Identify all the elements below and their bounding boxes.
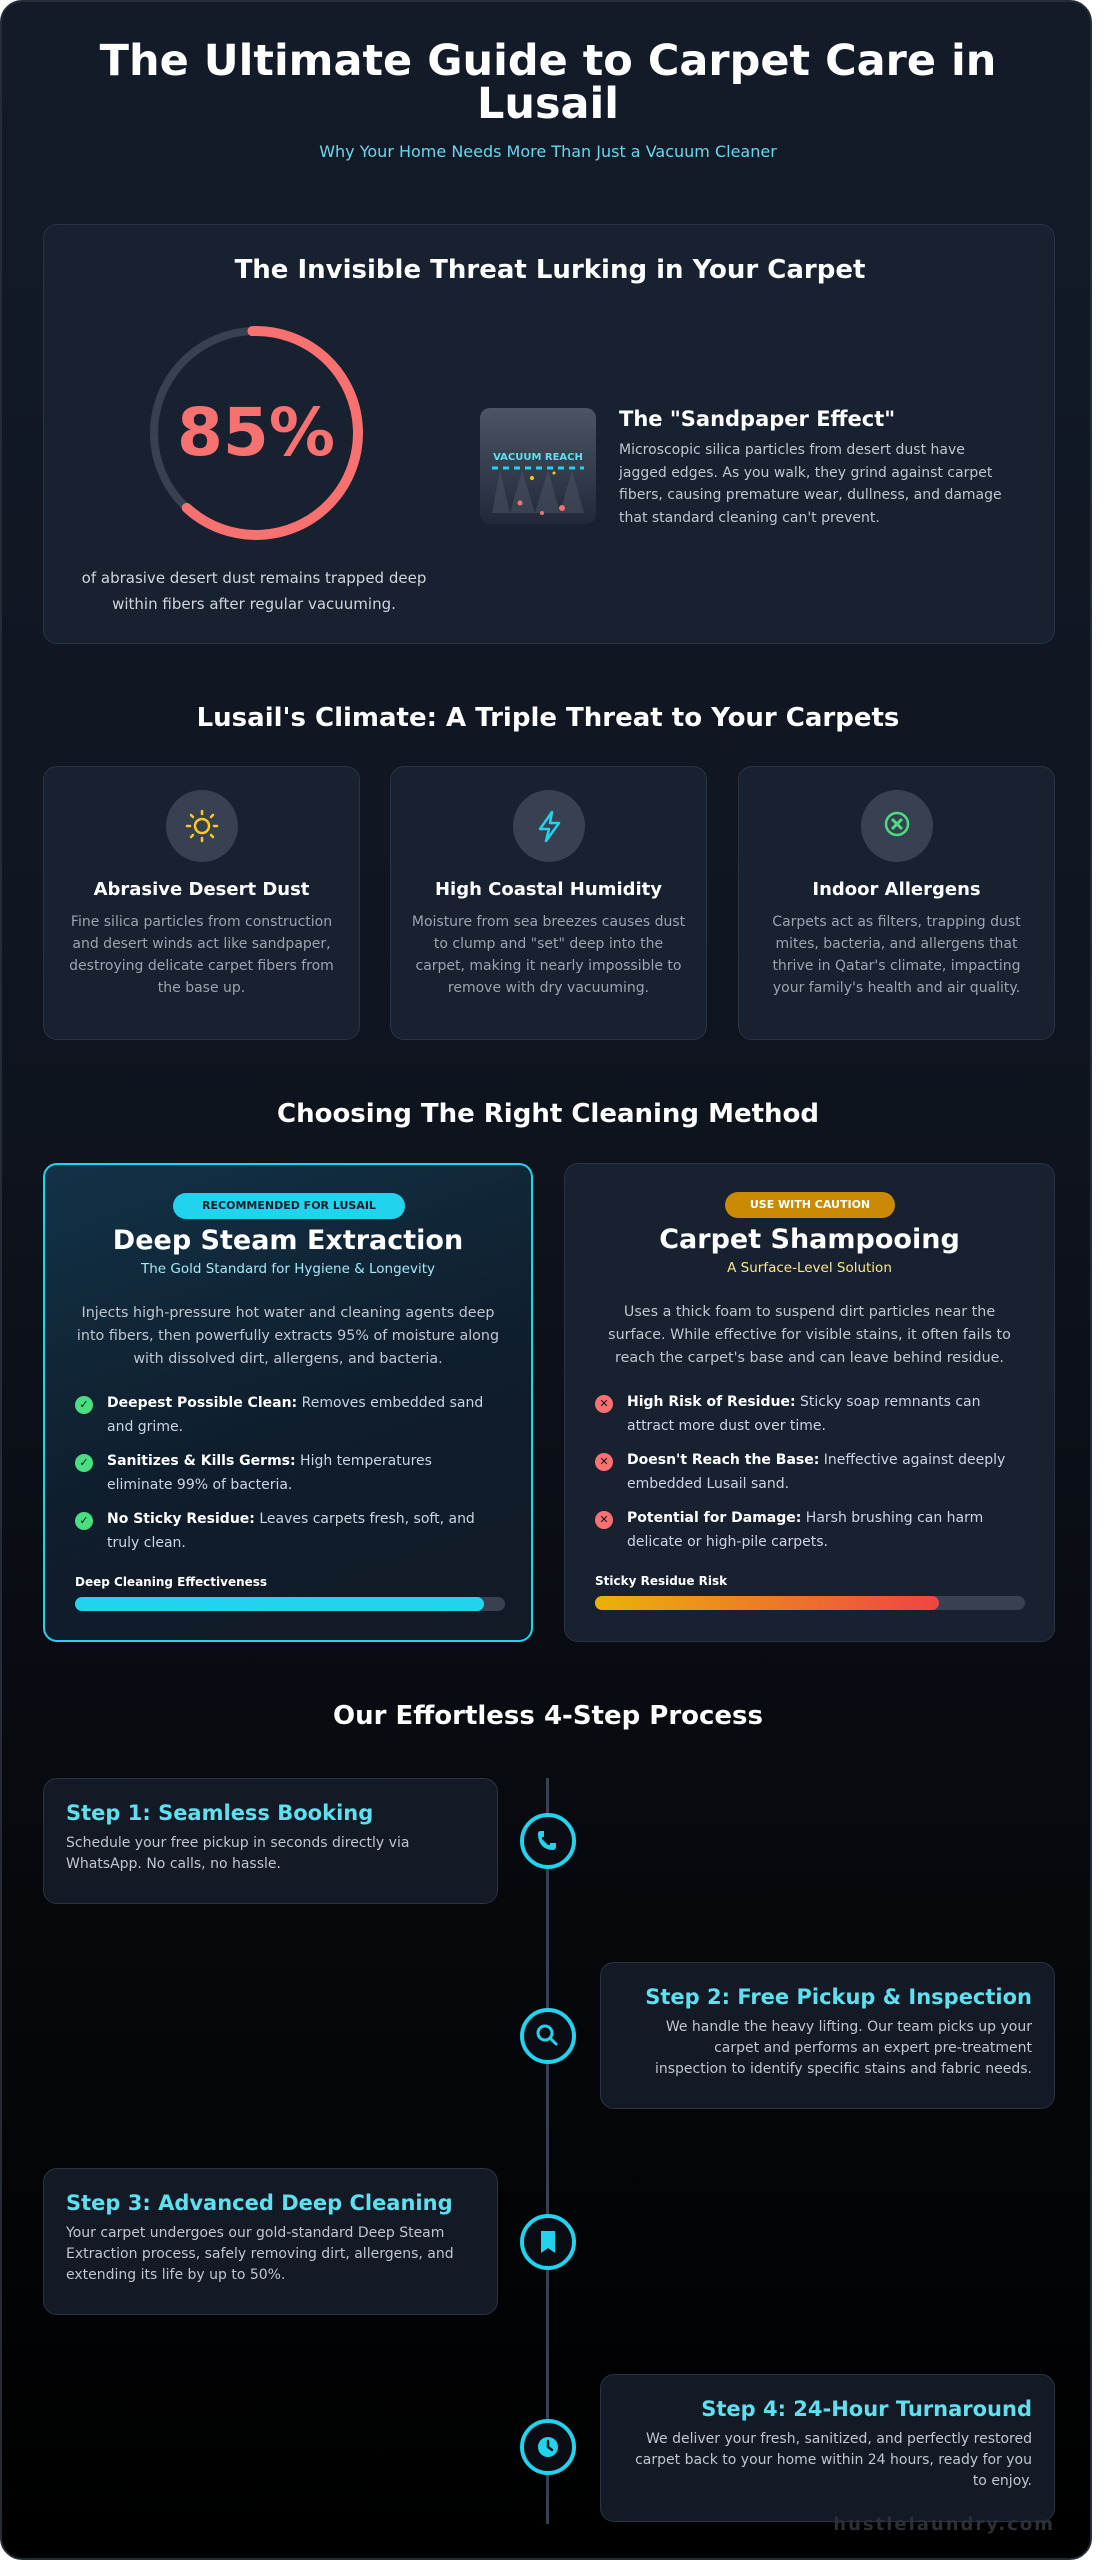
- heading: cleaning method: Choosing The Right Cleaning Method: [277, 1099, 819, 1129]
- step 2: Step 2: Free Pickup & Inspection: [645, 1985, 1032, 2009]
- bullet: sanitizes: Sanitizes & Kills Germs: High temperatures eliminate 99% of bacteria.: [107, 1453, 432, 1493]
- watermark: hustlelaundry.com: [833, 2514, 1055, 2535]
- badge: recommended: [173, 1193, 405, 1219]
- subtitle: Why Your Home Needs More Than Just a Vacuum Cleaner: [319, 142, 777, 161]
- bullet: no residue: ✓: [79, 1514, 89, 1527]
- timeline: process: [546, 1778, 549, 2524]
- chart: 85% ring: 85%: [177, 394, 335, 471]
- bullet: deepest clean: Deepest Possible Clean: Removes embedded sand and grime.: [107, 1395, 483, 1435]
- step 4: Step 4: 24-Hour Turnaround: [701, 2397, 1032, 2421]
- heading: process: Our Effortless 4-Step Process: [333, 1701, 763, 1731]
- text block: sandpaper effect: The "Sandpaper Effect": [619, 407, 895, 431]
- bar: deep cleaning effectiveness: Deep Cleaning Effectiveness: [75, 1575, 267, 1589]
- step 2: We handle the heavy lifting. Our team picks up your carpet and performs an expert pre-treatment inspection to identify specific stains and fabric needs.: [655, 2019, 1032, 2077]
- heading: invisible threat: The Invisible Threat Lurking in Your Carpet: [235, 255, 865, 285]
- caption: 85%: of abrasive desert dust remains trapped deep within fibers after regular vacuuming.: [82, 569, 426, 613]
- panel: deep steam extraction: [43, 1163, 533, 1642]
- bullet: residue: ✕: [599, 1397, 609, 1410]
- heading: climate: Lusail's Climate: A Triple Threat to Your Carpets: [197, 703, 899, 733]
- icon: phone: [520, 1813, 576, 1869]
- badge: caution: USE WITH CAUTION: [750, 1198, 870, 1211]
- panel: humidity: [390, 766, 707, 1040]
- icon: sun: [166, 790, 238, 862]
- panel: allergens: Carpets act as filters, trapping dust mites, bacteria, and allergens that thrive in Qatar's climate, impacting your family's health and air quality.: [772, 914, 1021, 996]
- panel: invisible threat: [43, 224, 1055, 644]
- panel: carpet shampooing: [564, 1163, 1055, 1642]
- step 2: [600, 1962, 1055, 2109]
- bar: sticky residue risk: Sticky Residue Risk: [595, 1574, 727, 1588]
- panel: allergens: Indoor Allergens: [812, 879, 981, 900]
- bullet: damage: Potential for Damage: Harsh brushing can harm delicate or high-pile carpets.: [627, 1510, 983, 1550]
- bullet: damage: ✕: [599, 1513, 609, 1526]
- panel: deep steam extraction: Deep Steam Extraction: [113, 1225, 463, 1256]
- badge: recommended: RECOMMENDED FOR LUSAIL: [202, 1199, 376, 1212]
- step 1: Step 1: Seamless Booking: [66, 1801, 373, 1825]
- panel: carpet shampooing: Carpet Shampooing: [659, 1224, 960, 1255]
- step 4: [600, 2374, 1055, 2522]
- step 1: [43, 1778, 498, 1904]
- icon: search: [520, 2008, 576, 2064]
- icon: vacuum reach illustration: [480, 408, 596, 524]
- panel: deep steam extraction: Injects high-pressure hot water and cleaning agents deep into fibers, then powerfully extracts 95% of moisture along with dissolved dirt, allergens, and bacteria.: [77, 1305, 499, 1367]
- panel: carpet shampooing: Uses a thick foam to suspend dirt particles near the surface. While effective for visible stains, it often fails to reach the carpet's base and can leave behind residue.: [608, 1304, 1011, 1366]
- panel: humidity: High Coastal Humidity: [435, 879, 662, 900]
- step 4: We deliver your fresh, sanitized, and perfectly restored carpet back to your home within 24 hours, ready for you to enjoy.: [635, 2431, 1032, 2489]
- panel: desert dust: Fine silica particles from construction and desert winds act like sandpaper, destroying delicate carpet fibers from the base up.: [69, 914, 334, 996]
- step 3: Your carpet undergoes our gold-standard Deep Steam Extraction process, safely removing dirt, allergens, and extending its life by up to 50%.: [66, 2225, 454, 2283]
- icon: bookmark: [520, 2214, 576, 2270]
- icon: allergen: [861, 790, 933, 862]
- panel: allergens: [738, 766, 1055, 1040]
- step 3: [43, 2168, 498, 2315]
- bullet: base: ✕: [599, 1455, 609, 1468]
- title: The Ultimate Guide to Carpet Care in Lusail: [100, 36, 996, 129]
- bullet: deepest clean: ✓: [79, 1398, 89, 1411]
- panel: desert dust: [43, 766, 360, 1040]
- panel: humidity: Moisture from sea breezes causes dust to clump and "set" deep into the carpet, making it nearly impossible to remove with dry vacuuming.: [412, 914, 685, 996]
- bullet: sanitizes: ✓: [79, 1456, 89, 1469]
- bullet: no residue: No Sticky Residue: Leaves carpets fresh, soft, and truly clean.: [107, 1511, 475, 1551]
- icon: vacuum reach illustration: VACUUM REACH: [493, 452, 583, 463]
- icon: clock: [520, 2419, 576, 2475]
- bullet: residue: High Risk of Residue: Sticky soap remnants can attract more dust over time.: [627, 1394, 980, 1434]
- bar: sticky residue risk: [595, 1574, 1025, 1610]
- text block: sandpaper effect: Microscopic silica particles from desert dust have jagged edges. As you walk, they grind against carpet fibers, causing premature wear, dullness, and damage that standard cleaning can't prevent.: [619, 442, 1002, 526]
- panel: desert dust: Abrasive Desert Dust: [94, 879, 309, 900]
- step 1: Schedule your free pickup in seconds directly via WhatsApp. No calls, no hassle.: [66, 1835, 409, 1872]
- chart: 85% ring: [150, 326, 363, 540]
- bar: deep cleaning effectiveness: [75, 1575, 505, 1611]
- panel: carpet shampooing: A Surface-Level Solution: [727, 1260, 892, 1276]
- badge: caution: [725, 1192, 895, 1218]
- panel: deep steam extraction: The Gold Standard for Hygiene & Longevity: [141, 1261, 435, 1277]
- bullet: base: Doesn't Reach the Base: Ineffective against deeply embedded Lusail sand.: [627, 1452, 1005, 1492]
- icon: bolt: [513, 790, 585, 862]
- step 3: Step 3: Advanced Deep Cleaning: [66, 2191, 453, 2215]
